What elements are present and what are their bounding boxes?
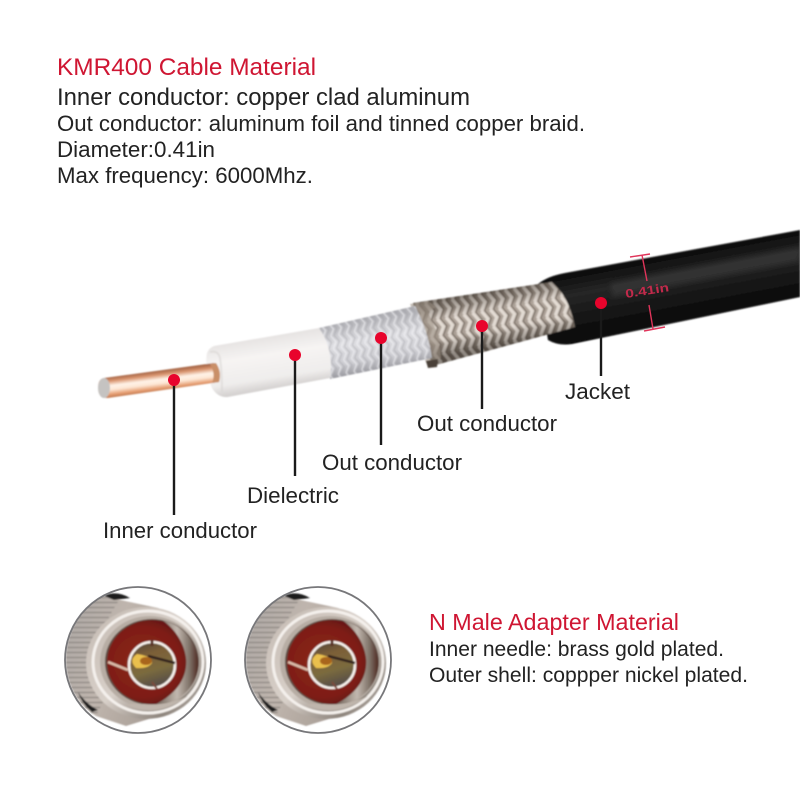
- coaxial cable cutaway: [98, 230, 800, 398]
- N male connector photo, left: [65, 587, 211, 733]
- text block: cable specifications: Max frequency: 6000Mhz.: [57, 163, 313, 188]
- text block: adapter materials: Outer shell: coppper nickel plated.: [429, 664, 748, 687]
- label: Inner conductor: Inner conductor: [103, 518, 257, 543]
- leader lines and callout dots: [168, 297, 607, 515]
- dimension marker: 0.41in: 0.41in: [624, 280, 670, 301]
- label: Jacket: Jacket: [565, 379, 630, 404]
- cable: copper inner conductor: [98, 363, 220, 398]
- text block: cable specifications: Inner conductor: copper clad aluminum: [57, 84, 470, 111]
- text block: cable specifications: Out conductor: aluminum foil and tinned copper braid.: [57, 111, 585, 136]
- text block: adapter materials: [429, 638, 748, 687]
- heading: KMR400 Cable Material: KMR400 Cable Material: [57, 54, 316, 81]
- text block: adapter materials: Inner needle: brass gold plated.: [429, 638, 724, 661]
- cable: braided out conductor: [410, 282, 575, 368]
- cable: foil out conductor: [319, 306, 432, 379]
- cable: dielectric: [206, 328, 331, 397]
- N male connector photo, right: [245, 587, 391, 733]
- label: Out conductor (braid): Out conductor: [417, 411, 557, 436]
- label: Out conductor (foil): Out conductor: [322, 450, 462, 475]
- label: Dielectric: Dielectric: [247, 483, 339, 508]
- dimension marker: 0.41in: [624, 254, 670, 331]
- heading: N Male Adapter Material: N Male Adapter Material: [429, 609, 679, 635]
- cable: jacket: [538, 230, 800, 344]
- text block: cable specifications: Diameter:0.41in: [57, 137, 215, 162]
- text block: cable specifications: [57, 84, 585, 188]
